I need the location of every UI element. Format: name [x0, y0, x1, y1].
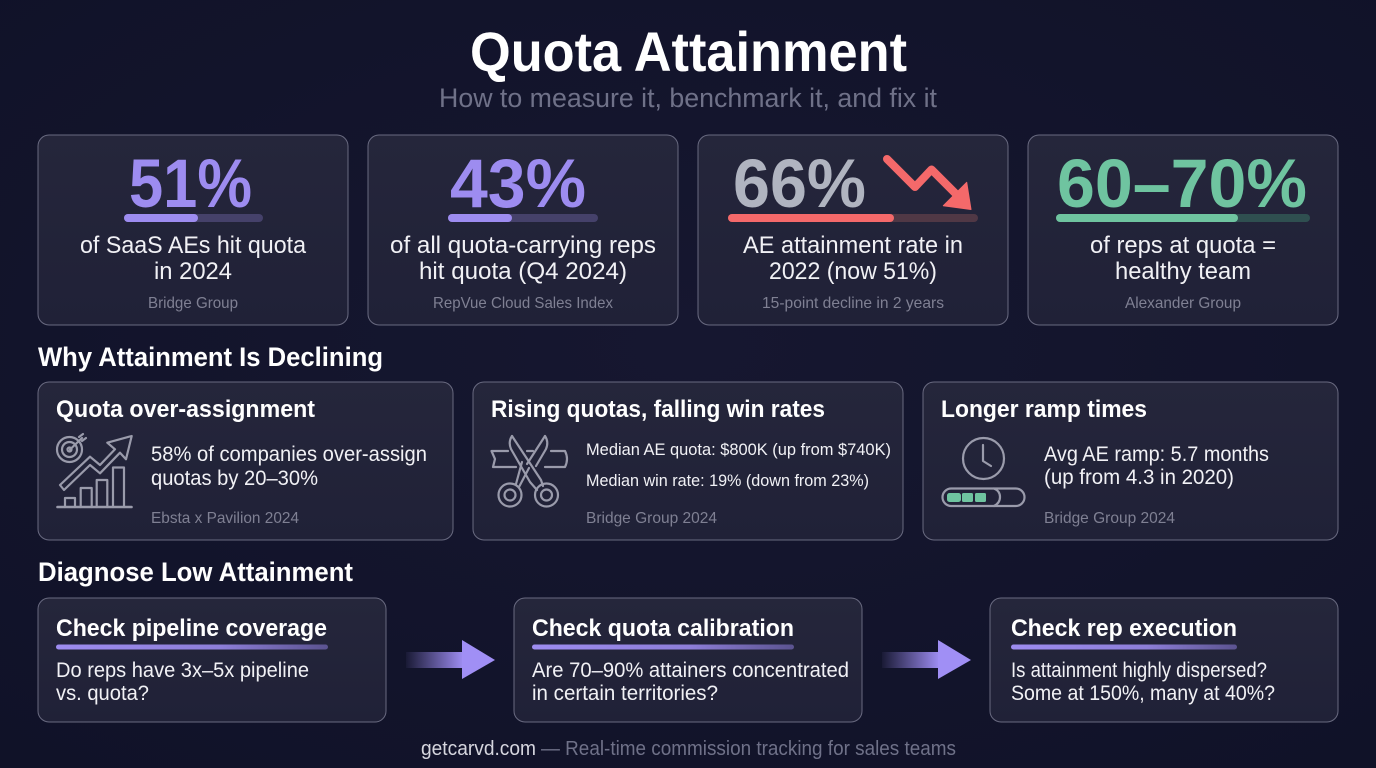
- step: check quota calibration: [514, 598, 862, 722]
- stat card: 43%: [368, 135, 678, 325]
- panel: rising quotas, falling win rates: Rising quotas, falling win rates: [491, 396, 825, 423]
- stat card: 60–70%: of reps at quota =: [1090, 233, 1276, 259]
- stat card: 60–70%: healthy team: [1115, 259, 1251, 285]
- stat card: 51%: of SaaS AEs hit quota: [80, 233, 307, 259]
- step: check rep execution: Check rep execution: [1011, 615, 1237, 642]
- step: check pipeline coverage: [38, 598, 386, 722]
- step: check pipeline coverage: Do reps have 3x–5x pipeline: [56, 659, 309, 682]
- step: check pipeline coverage: Check pipeline coverage: [56, 615, 327, 642]
- step: check quota calibration: in certain territories?: [532, 682, 718, 705]
- panel: longer ramp times: Longer ramp times: [941, 396, 1147, 423]
- panel: longer ramp times: Avg AE ramp: 5.7 months: [1044, 443, 1269, 466]
- panel: quota over-assignment: quotas by 20–30%: [151, 467, 318, 490]
- panel: longer ramp times: [923, 382, 1338, 540]
- stat card: 51%: in 2024: [154, 259, 232, 285]
- step: check rep execution: Is attainment highly dispersed?: [1011, 659, 1267, 682]
- step: check quota calibration: Check quota calibration: [532, 615, 794, 642]
- panel: rising quotas, falling win rates: Median win rate: 19% (down from 23%): [586, 471, 869, 490]
- stat card: 43%: RepVue Cloud Sales Index: [433, 295, 613, 312]
- icon: clock and progress bar: [942, 438, 1024, 506]
- stat card: 66%: AE attainment rate in: [743, 233, 963, 259]
- panel: quota over-assignment: Ebsta x Pavilion 2024: [151, 510, 299, 527]
- panel: rising quotas, falling win rates: Bridge Group 2024: [586, 510, 717, 527]
- step: check quota calibration: Are 70–90% attainers concentrated: [532, 659, 849, 682]
- subtitle: How to measure it, benchmark it, and fix it: [439, 83, 937, 113]
- stat card: 66%: 66%: [733, 145, 866, 222]
- footer: getcarvd.com: [421, 738, 536, 760]
- panel: quota over-assignment: Quota over-assignment: [56, 396, 315, 423]
- icon: target and rising chart: [57, 434, 132, 507]
- panel: rising quotas, falling win rates: [473, 382, 903, 540]
- panel: rising quotas, falling win rates: Median AE quota: $800K (up from $740K): [586, 440, 891, 459]
- icon: falling red arrow: [887, 159, 971, 210]
- stat card: 60–70%: Alexander Group: [1125, 295, 1241, 312]
- stat card: 66%: [698, 135, 1008, 325]
- stat card: 66%: 15-point decline in 2 years: [762, 295, 944, 312]
- panel: quota over-assignment: [38, 382, 453, 540]
- panel: longer ramp times: Bridge Group 2024: [1044, 510, 1175, 527]
- footer: — Real-time commission tracking for sales teams: [541, 738, 956, 760]
- stat card: 51%: 51%: [129, 145, 252, 222]
- step: check pipeline coverage: vs. quota?: [56, 682, 149, 705]
- step: check rep execution: Some at 150%, many at 40%?: [1011, 682, 1275, 705]
- stat card: 43%: 43%: [450, 145, 586, 222]
- stat card: 66%: 2022 (now 51%): [769, 259, 937, 285]
- stat card: 51%: Bridge Group: [148, 295, 238, 312]
- arrow: step two to step three: [882, 640, 971, 679]
- panel: longer ramp times: (up from 4.3 in 2020): [1044, 466, 1234, 489]
- heading: why attainment is declining: Why Attainment Is Declining: [38, 342, 383, 372]
- stat card: 51%: [38, 135, 348, 325]
- heading: diagnose low attainment: Diagnose Low Attainment: [38, 557, 353, 587]
- stat card: 43%: of all quota-carrying reps: [390, 233, 656, 259]
- title: Quota Attainment: [470, 20, 907, 83]
- arrow: step one to step two: [406, 640, 495, 679]
- icon: scissors cutting ribbon: [492, 436, 567, 506]
- step: check rep execution: [990, 598, 1338, 722]
- panel: quota over-assignment: 58% of companies over-assign: [151, 443, 427, 466]
- stat card: 43%: hit quota (Q4 2024): [419, 259, 627, 285]
- stat card: 60–70%: 60–70%: [1057, 145, 1307, 222]
- stat card: 60–70%: [1028, 135, 1338, 325]
